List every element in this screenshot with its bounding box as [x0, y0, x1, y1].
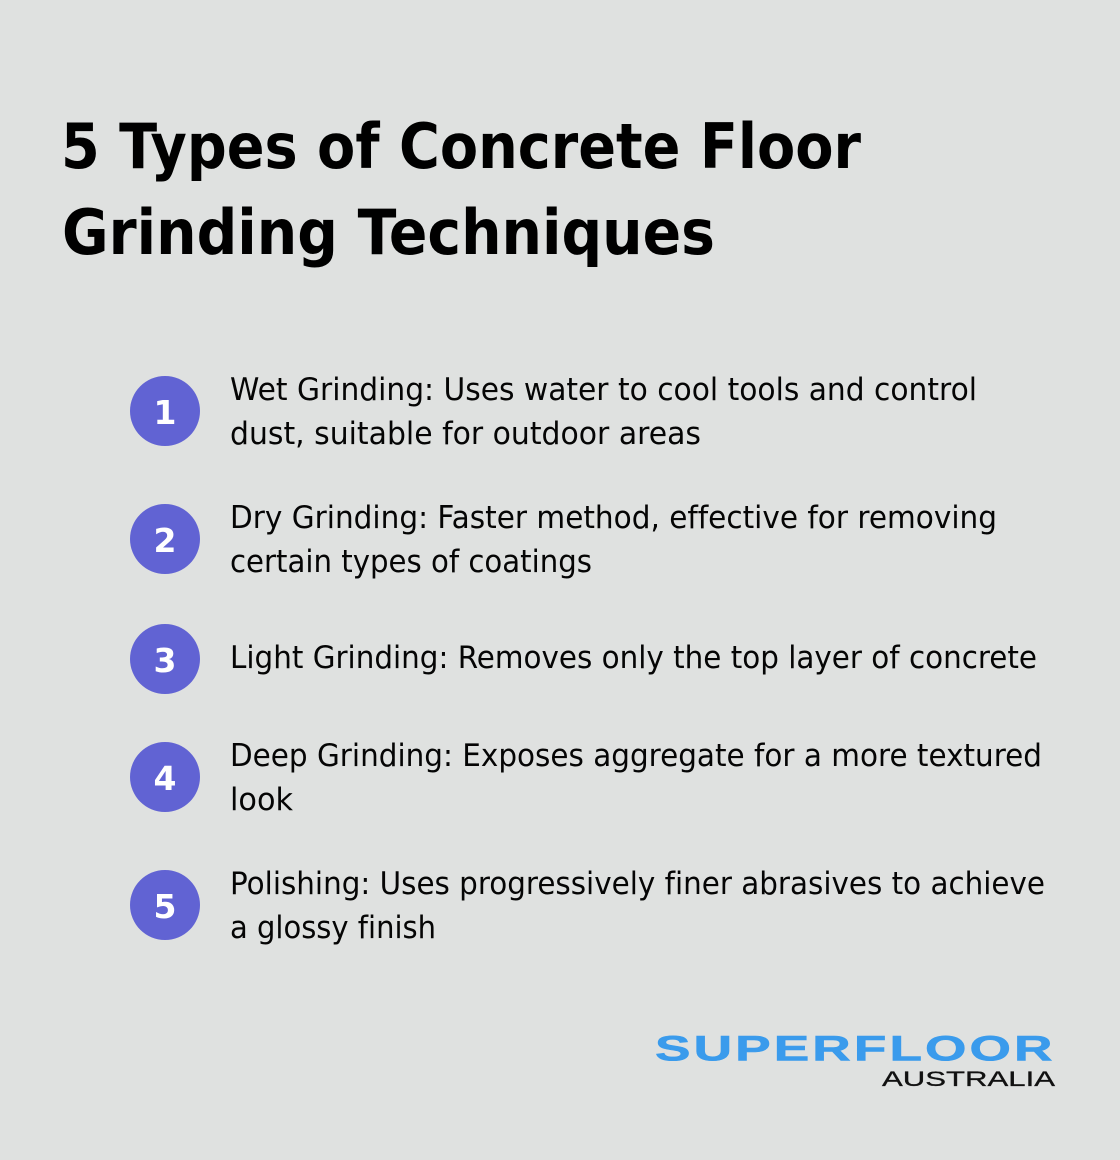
text: dry grinding: certain types of coatings [230, 544, 592, 580]
list item 4: deep grinding [130, 738, 1042, 818]
number badge 4: 4 [154, 759, 176, 798]
title [61, 110, 861, 269]
number badge 3 [130, 624, 200, 694]
text: dry grinding: Dry Grinding: Faster method, effective for removing [230, 500, 997, 536]
text: polishing [230, 866, 1045, 946]
text: polishing: Polishing: Uses progressively finer abrasives to achieve [230, 866, 1045, 902]
number badge 2 [130, 504, 200, 574]
text: wet grinding [230, 372, 977, 452]
number badge 1: 1 [154, 393, 176, 432]
number badge 4 [130, 742, 200, 812]
list item 3: light grinding [130, 624, 1037, 694]
text: deep grinding: Deep Grinding: Exposes aggregate for a more textured [230, 738, 1042, 774]
list item 5: polishing [130, 866, 1045, 946]
number badge 5 [130, 870, 200, 940]
number badge 2: 2 [154, 521, 176, 560]
number badge 5: 5 [154, 887, 176, 926]
number badge 1 [130, 376, 200, 446]
text: dry grinding [230, 500, 997, 580]
text: wet grinding: Wet Grinding: Uses water to cool tools and control [230, 372, 977, 408]
logo: Superfloor Australia [655, 1028, 1055, 1091]
list item 1: wet grinding [130, 372, 977, 452]
logo: Superfloor Australia: SUPERFLOOR [655, 1028, 1053, 1068]
text: wet grinding: dust, suitable for outdoor areas [230, 416, 701, 452]
logo: Superfloor Australia: AUSTRALIA [882, 1068, 1055, 1091]
number badge 3: 3 [154, 641, 176, 680]
text: deep grinding [230, 738, 1042, 818]
title: Grinding Techniques [62, 196, 715, 269]
text: deep grinding: look [230, 782, 293, 818]
title: 5 Types of Concrete Floor [61, 110, 861, 183]
list item 2: dry grinding [130, 500, 997, 580]
text: light grinding: Light Grinding: Removes only the top layer of concrete [230, 640, 1037, 676]
text: polishing: a glossy finish [230, 910, 436, 946]
